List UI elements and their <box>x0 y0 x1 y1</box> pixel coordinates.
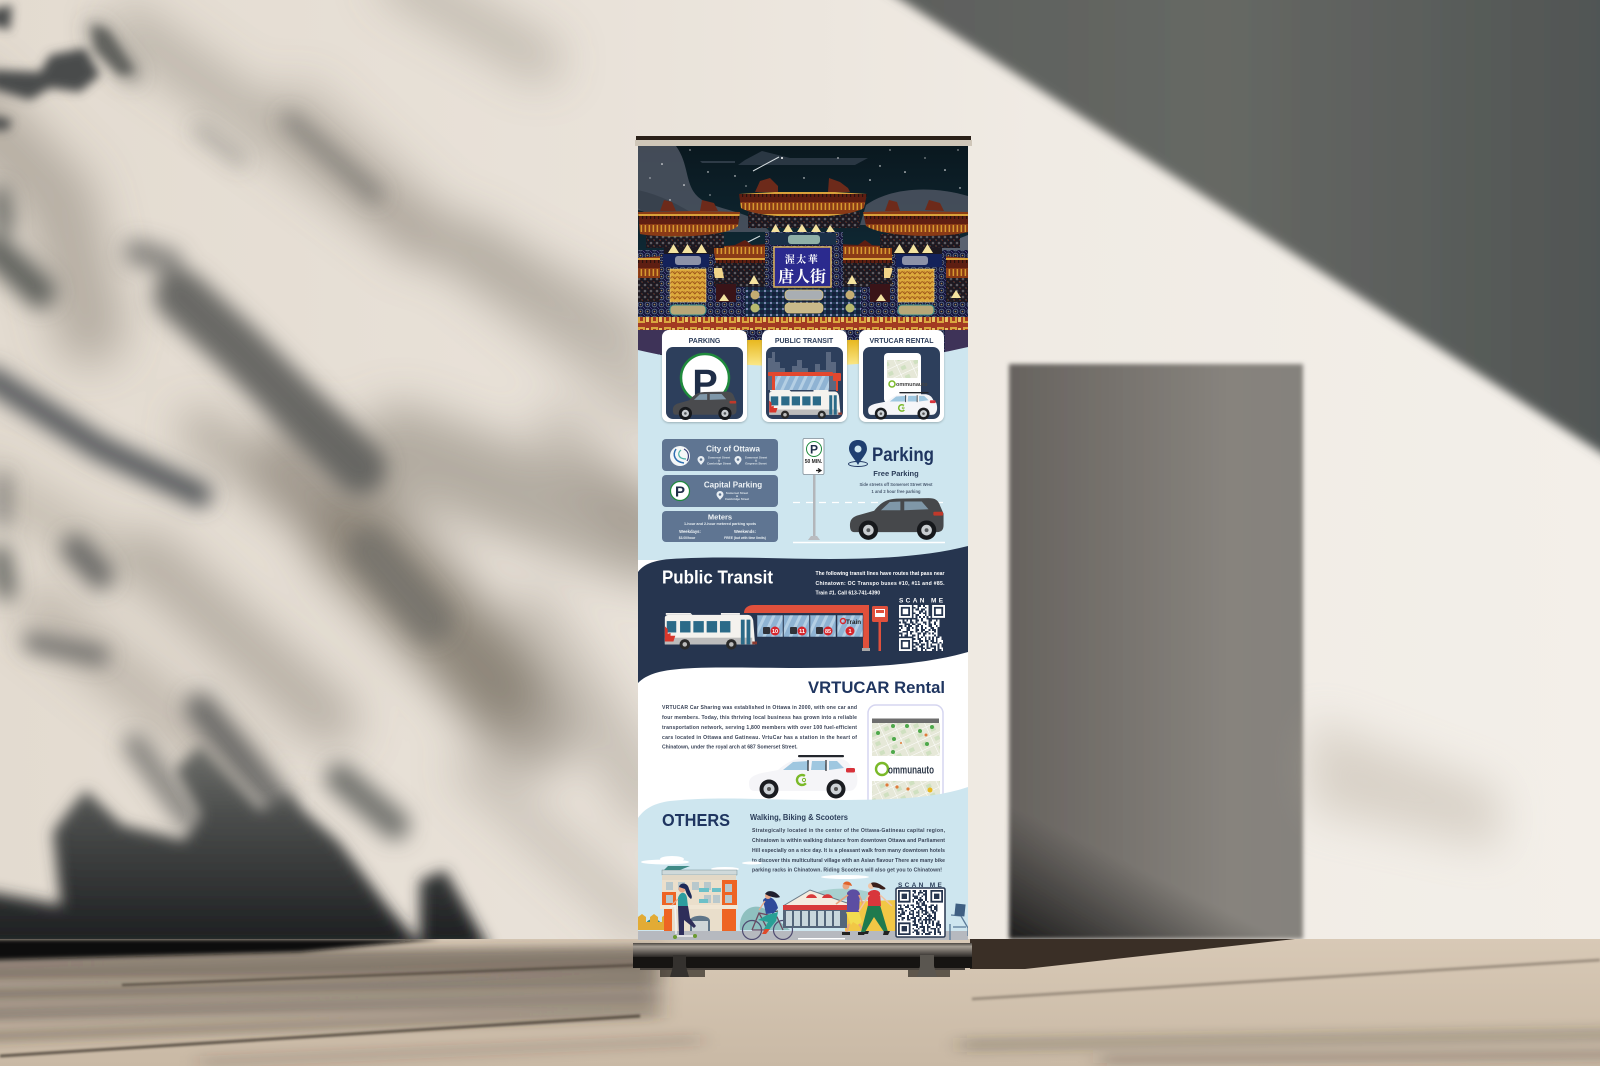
white rental car <box>749 755 857 798</box>
phone with Communauto app: ommunauto <box>888 764 934 776</box>
free parking text: 1 and 2 hour free parking <box>872 489 921 494</box>
info panel: City of Ottawa <box>662 439 778 471</box>
free parking text: Side streets off Somerset Street West <box>860 482 933 487</box>
right tower <box>863 200 968 317</box>
others description: to discover this multicultural village with an Asian flavour There are many bike <box>752 858 945 864</box>
VRTUCAR description: Chinatown, under the royal arch at 687 Somerset Street. <box>662 744 798 750</box>
parking sign on pole: 50 MIN. <box>805 459 823 465</box>
info panel: Meters <box>662 511 778 542</box>
info panel: City of Ottawa: & <box>755 458 757 462</box>
clouds <box>641 856 869 879</box>
parking heading: Parking <box>872 444 934 466</box>
info panel: Capital Parking: P <box>675 484 685 500</box>
bottom street scene <box>638 856 968 940</box>
info panel: City of Ottawa: Empress Street <box>745 462 767 466</box>
others description: Hill especially on a nice day. It is a pleasant walk from many downtown hotels <box>752 848 945 854</box>
others description: Strategically located in the center of the Ottawa-Gatineau capital region, <box>752 828 946 834</box>
center tower <box>739 178 867 288</box>
info panel: Capital Parking: Cambridge Street <box>725 497 749 501</box>
arch name board: 渥太華 <box>785 253 819 266</box>
arch name board <box>774 247 831 287</box>
info panel: Capital Parking <box>662 475 778 507</box>
QR code <box>896 888 945 937</box>
category card: VRTUCAR Rental <box>859 330 944 422</box>
stars <box>649 149 961 201</box>
parking sign on pole: P <box>810 442 818 456</box>
category card: Parking: P <box>692 363 718 405</box>
station building <box>783 890 847 928</box>
woman on scooter <box>670 883 697 939</box>
arch body: lower ornate wall <box>638 250 968 355</box>
poster <box>638 146 968 940</box>
center ornate panel with medallions <box>745 287 861 318</box>
category card: Parking: PARKING <box>689 338 721 345</box>
info panel: City of Ottawa: & <box>718 458 720 462</box>
far side roofs <box>638 256 968 302</box>
left tower <box>638 200 740 317</box>
road markings <box>793 502 945 542</box>
others subheading: Walking, Biking & Scooters <box>750 813 849 822</box>
diagonal shadow, upper right <box>880 0 1600 478</box>
free parking text: Free Parking <box>873 469 919 478</box>
category card: VRTUCAR Rental: ommunauto <box>896 382 928 388</box>
info panel: City of Ottawa: Somerset Street <box>708 456 730 460</box>
route panel train 1: 1 <box>848 629 852 635</box>
foliage shadows on the wall <box>0 0 650 950</box>
gold glow under arch <box>747 340 763 366</box>
category card: VRTUCAR Rental: VRTUCAR RENTAL <box>869 338 934 345</box>
walking woman <box>858 882 892 935</box>
others section <box>638 787 968 940</box>
phone with Communauto app <box>868 705 943 825</box>
info panel: Meters: Weekends: <box>734 529 756 534</box>
others heading: OTHERS <box>662 810 730 830</box>
bus stop shelter <box>744 605 888 651</box>
free parking text <box>860 469 933 494</box>
scan me label: SCAN ME <box>898 882 944 889</box>
QR code <box>899 605 945 651</box>
others description: Chinatown is within walking distance from downtown Ottawa and Parliament <box>752 838 945 844</box>
VRTUCAR heading: VRTUCAR Rental <box>808 678 945 697</box>
info panel: City of Ottawa: Cambridge Street <box>707 462 731 466</box>
category card: Public Transit: PUBLIC TRANSIT <box>775 338 834 345</box>
category card: Parking <box>662 330 747 422</box>
public transit section <box>638 546 968 683</box>
info panel: Meters: Meters <box>708 512 732 522</box>
floor <box>0 939 1600 1066</box>
VRTUCAR section <box>662 678 945 825</box>
light blue parking section <box>638 347 968 560</box>
VRTUCAR description: VRTUCAR Car Sharing was established in Ottawa in 2000, with one car and <box>662 705 857 711</box>
route panel 10 <box>757 615 783 637</box>
route panel train 1 <box>837 615 863 637</box>
route panel 85: 85 <box>825 629 831 635</box>
info panel: Capital Parking: Capital Parking <box>704 480 762 490</box>
info panel: Capital Parking: & <box>736 494 738 498</box>
location pin icon <box>848 440 868 466</box>
cyclist <box>742 891 792 940</box>
route panel 11: 11 <box>799 629 805 635</box>
bike rack <box>950 904 968 940</box>
VRTUCAR description: cars located in Ottawa and Gatineau. VrtuCar has a station in the heart of <box>662 735 857 741</box>
apartment building <box>660 866 738 931</box>
transit heading: Public Transit <box>662 568 773 588</box>
VRTUCAR description <box>662 705 857 750</box>
road <box>638 931 968 940</box>
scan me label: SCAN ME <box>899 598 945 604</box>
transit description <box>816 571 945 596</box>
clouds <box>638 146 968 250</box>
info panel: Meters: $3.00/hour <box>679 536 696 540</box>
route panel 85 <box>810 615 836 637</box>
night sky <box>638 146 968 356</box>
others description <box>752 828 946 874</box>
VRTUCAR description: four members. Today, this thriving local business has grown into a reliable <box>662 715 857 721</box>
roll-up banner stand <box>633 136 972 977</box>
info panel: Meters: FREE (but with time limits) <box>724 536 766 540</box>
info panel: Meters: Weekdays: <box>679 529 701 534</box>
info panel: Capital Parking: Somerset Street <box>726 491 748 495</box>
arch name board: 唐人街 <box>778 267 826 286</box>
category card: Public Transit <box>762 330 847 422</box>
gold frieze band <box>638 317 968 330</box>
route panel 11 <box>784 615 810 637</box>
info panel: City of Ottawa: City of Ottawa <box>706 444 760 454</box>
info panel: Meters: 1-hour and 2-hour metered parking spots <box>684 522 756 526</box>
shooting stars <box>744 157 779 244</box>
transit description: Train #1. Call 613-741-4390 <box>816 590 880 596</box>
route panel 10: 10 <box>772 629 778 635</box>
VRTUCAR description: transportation network, serving 1,800 members with over 100 fuel-efficient <box>662 725 857 731</box>
others description: parking racks in Chinatown. Riding Scooters will also get you to Chinatown! <box>752 868 942 874</box>
runner man <box>836 882 869 935</box>
dark parked car <box>850 498 944 540</box>
soft shadow, lower right wall <box>1310 720 1500 850</box>
fence <box>638 914 670 930</box>
parking sign on pole <box>803 438 824 540</box>
distant trees <box>645 889 880 930</box>
stand: base cassette <box>633 943 972 977</box>
bus <box>665 613 757 650</box>
transit description: The following transit lines have routes that pass near <box>816 571 945 577</box>
route panel train 1: Train <box>846 619 861 626</box>
header illustration: Chinatown royal arch <box>638 146 968 366</box>
yellow field <box>845 900 898 932</box>
city logo <box>670 446 690 466</box>
pillar shadow <box>1009 364 1303 939</box>
inner low roofs <box>713 240 895 302</box>
lower side panels <box>638 330 666 354</box>
transit description: Chinatown: OC Transpo buses #10, #11 and #85. <box>816 581 945 587</box>
info panel: City of Ottawa: Somerset Street <box>745 456 767 460</box>
stand: top rail <box>635 136 972 146</box>
